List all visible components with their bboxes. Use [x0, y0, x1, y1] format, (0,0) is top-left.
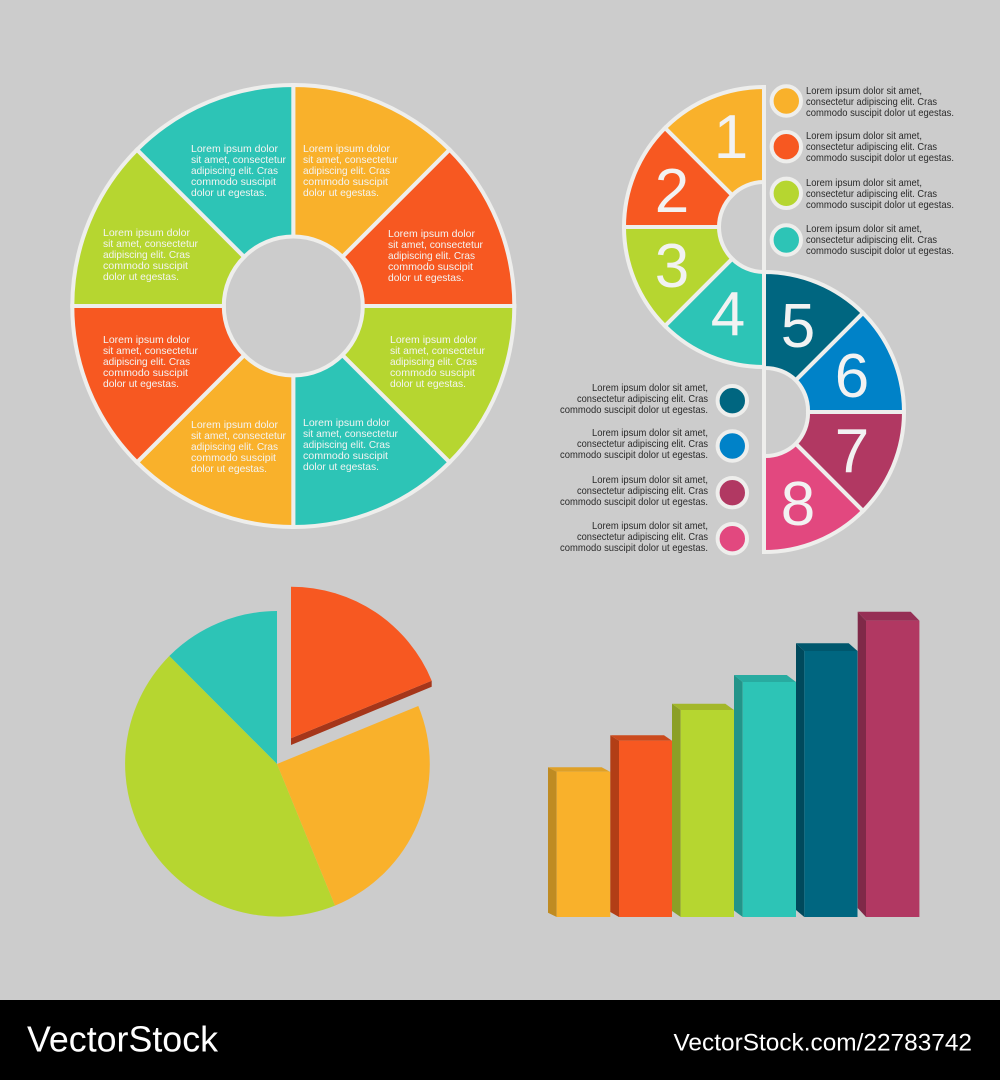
legend item 2 [772, 131, 954, 164]
legend item 7: consectetur adipiscing elit. Cras [577, 486, 708, 497]
legend item 4: Lorem ipsum dolor sit amet, [806, 224, 922, 235]
legend item 1: commodo suscipit dolor ut egestas. [806, 108, 954, 119]
step 5 [764, 272, 863, 380]
legend: steps 1 to 4 [772, 86, 954, 257]
footer image id: VectorStock.com/22783742 [674, 1030, 972, 1057]
segment: bottom left yellow: commodo suscipit [191, 453, 276, 464]
segment: left upper green: dolor ut egestas. [103, 272, 179, 283]
3D bar chart [548, 612, 920, 917]
legend item 4: commodo suscipit dolor ut egestas. [806, 246, 954, 257]
segment: bottom left yellow [137, 355, 293, 527]
legend item 3: commodo suscipit dolor ut egestas. [806, 200, 954, 211]
segment: bottom left yellow: Lorem ipsum dolor [191, 420, 279, 431]
segment: right upper orange [342, 150, 514, 306]
legend item 4 [772, 224, 954, 257]
segment: left lower orange: dolor ut egestas. [103, 379, 179, 390]
step 3 [624, 227, 732, 326]
legend item 5: Lorem ipsum dolor sit amet, [592, 383, 708, 394]
segment: bottom right teal: commodo suscipit [303, 451, 388, 462]
segment: left lower orange: adipiscing elit. Cras [103, 357, 190, 368]
segment: left lower orange: commodo suscipit [103, 368, 188, 379]
legend item 1: Lorem ipsum dolor sit amet, [806, 86, 922, 97]
legend item 2: consectetur adipiscing elit. Cras [806, 142, 937, 153]
segment: top left teal [137, 85, 293, 257]
bar 5 dark teal [796, 643, 858, 917]
legend item 6 [560, 428, 747, 461]
legend item 3 [772, 178, 954, 211]
exploded slice: orange with depth [291, 587, 432, 745]
segment: right upper orange: dolor ut egestas. [388, 273, 464, 284]
segment: right upper orange: sit amet, consectetur [388, 240, 484, 251]
segment: top right yellow: commodo suscipit [303, 177, 388, 188]
step 7: 7 [835, 417, 869, 486]
step 7 [796, 412, 904, 511]
segment: bottom left yellow: adipiscing elit. Cras [191, 442, 278, 453]
legend item 5: commodo suscipit dolor ut egestas. [560, 405, 708, 416]
segment: bottom left yellow: dolor ut egestas. [191, 464, 267, 475]
segment: right lower green: Lorem ipsum dolor [390, 335, 478, 346]
bar 3 green [672, 704, 734, 917]
legend item 6: consectetur adipiscing elit. Cras [577, 439, 708, 450]
legend: steps 5 to 8 [560, 383, 747, 554]
segment: left lower orange [72, 306, 244, 462]
segment: left upper green: sit amet, consectetur [103, 239, 199, 250]
legend item 7 [560, 475, 747, 508]
S-shaped numbered chart [624, 85, 904, 554]
segment: bottom left yellow: sit amet, consectetur [191, 431, 287, 442]
pie slice: green [125, 656, 335, 917]
step 6 [796, 313, 904, 412]
step 4 [665, 259, 764, 367]
segment: bottom right teal: Lorem ipsum dolor [303, 418, 391, 429]
legend item 8: commodo suscipit dolor ut egestas. [560, 543, 708, 554]
step 4: 4 [711, 280, 745, 349]
step 1: 1 [714, 103, 748, 172]
pie slice: teal [169, 611, 277, 764]
legend item 6: commodo suscipit dolor ut egestas. [560, 450, 708, 461]
pie chart with exploded slice [125, 587, 432, 917]
footer logo text: VectorStock [27, 1018, 219, 1060]
bar 6 crimson [858, 612, 920, 917]
segment: right upper orange: Lorem ipsum dolor [388, 229, 476, 240]
segment: left upper green: Lorem ipsum dolor [103, 228, 191, 239]
segment: bottom right teal: dolor ut egestas. [303, 462, 379, 473]
segment: right lower green: adipiscing elit. Cras [390, 357, 477, 368]
segment: top left teal: commodo suscipit [191, 177, 276, 188]
segment: top right yellow: dolor ut egestas. [303, 188, 379, 199]
legend item 3: consectetur adipiscing elit. Cras [806, 189, 937, 200]
legend item 4: consectetur adipiscing elit. Cras [806, 235, 937, 246]
segment: right lower green: sit amet, consectetur [390, 346, 486, 357]
segment: bottom right teal: sit amet, consectetur [303, 429, 399, 440]
step 1 [665, 87, 764, 195]
legend item 2: commodo suscipit dolor ut egestas. [806, 153, 954, 164]
segment: right lower green [342, 306, 514, 462]
step 5: 5 [781, 292, 815, 361]
bar 4 teal [734, 675, 796, 917]
legend item 8: consectetur adipiscing elit. Cras [577, 532, 708, 543]
segment: left lower orange: sit amet, consectetur [103, 346, 199, 357]
step 2: 2 [655, 157, 689, 226]
segment: left lower orange: Lorem ipsum dolor [103, 335, 191, 346]
segment: right upper orange: commodo suscipit [388, 262, 473, 273]
bar 2 orange [610, 735, 672, 917]
segment: top left teal: adipiscing elit. Cras [191, 166, 278, 177]
segment: right upper orange: adipiscing elit. Cras [388, 251, 475, 262]
legend item 2: Lorem ipsum dolor sit amet, [806, 131, 922, 142]
segment: top left teal: sit amet, consectetur [191, 155, 287, 166]
segment: right lower green: commodo suscipit [390, 368, 475, 379]
step 3: 3 [655, 232, 689, 301]
step 6: 6 [835, 342, 869, 411]
segment: right lower green: dolor ut egestas. [390, 379, 466, 390]
legend item 6: Lorem ipsum dolor sit amet, [592, 428, 708, 439]
segment: top right yellow: adipiscing elit. Cras [303, 166, 390, 177]
segment: bottom right teal [293, 355, 450, 527]
donut chart: eight text segments [72, 85, 514, 527]
legend item 8 [560, 521, 747, 554]
legend item 7: commodo suscipit dolor ut egestas. [560, 497, 708, 508]
legend item 1 [772, 86, 954, 119]
legend item 1: consectetur adipiscing elit. Cras [806, 97, 937, 108]
segment: left upper green: adipiscing elit. Cras [103, 250, 190, 261]
legend item 8: Lorem ipsum dolor sit amet, [592, 521, 708, 532]
legend item 5 [560, 383, 747, 416]
step 2 [624, 128, 732, 227]
footer band [0, 1000, 1000, 1080]
segment: top right yellow: sit amet, consectetur [303, 155, 399, 166]
pie slice: yellow [277, 706, 430, 906]
bar 1 yellow [548, 767, 610, 917]
legend item 7: Lorem ipsum dolor sit amet, [592, 475, 708, 486]
legend item 3: Lorem ipsum dolor sit amet, [806, 178, 922, 189]
segment: top right yellow [293, 85, 450, 257]
segment: top left teal: Lorem ipsum dolor [191, 144, 279, 155]
step 8: 8 [781, 470, 815, 539]
segment: bottom right teal: adipiscing elit. Cras [303, 440, 390, 451]
segment: top left teal: dolor ut egestas. [191, 188, 267, 199]
segment: left upper green [72, 150, 244, 306]
segment: left upper green: commodo suscipit [103, 261, 188, 272]
step 8 [764, 444, 863, 552]
legend item 5: consectetur adipiscing elit. Cras [577, 394, 708, 405]
segment: top right yellow: Lorem ipsum dolor [303, 144, 391, 155]
